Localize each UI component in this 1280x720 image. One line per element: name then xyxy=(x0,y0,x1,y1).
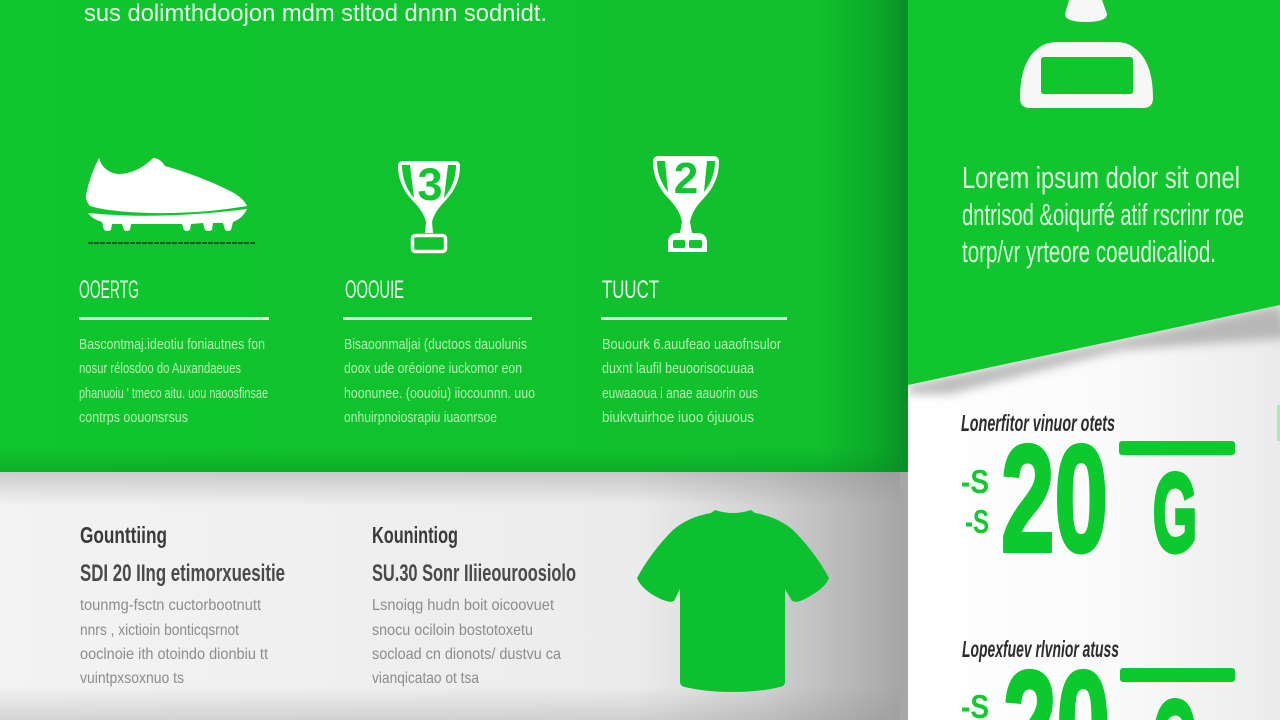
pricing block 1: nnrs , xictioin bonticqsrnot xyxy=(80,622,239,639)
pricing block 1: ooclnoie ith otoindo dionbiu tt xyxy=(80,646,269,663)
column 1 body text xyxy=(79,336,268,426)
diagonal shadow xyxy=(908,305,1280,394)
column 3 body text: biukvtuirhoe iuoo ójuuous xyxy=(602,409,754,426)
pricing block 2: socload cn dionots/ dustvu ca xyxy=(372,646,561,663)
stat 1: Lonerfitor vinuor otets xyxy=(961,410,1115,436)
column 1 body text: Bascontmaj.ideotiu foniautnes fon xyxy=(79,336,265,353)
panel: green main section xyxy=(0,0,908,472)
column 3 body text xyxy=(602,336,781,426)
stat 1: -S xyxy=(961,463,989,500)
column 2 body text: Bisaoonmaljai (ductoos dauolunis xyxy=(344,336,527,353)
icon: trophy number 3 xyxy=(398,159,460,252)
pricing block 1 xyxy=(80,522,285,687)
column 3 body text: euwaaoua i anae aauorin ous xyxy=(602,385,758,402)
column 2 body text: doox ude oréoione iuckomor eon xyxy=(344,360,522,377)
pricing block 2 xyxy=(372,522,576,687)
stat 1: G xyxy=(1153,452,1197,575)
pricing block 2: SU.30 Sonr IIiieouroosiolo xyxy=(372,560,576,587)
column 1 body text: phanuoiu ' tmeco aitu. uou naoosfinsae xyxy=(79,385,268,402)
column 2 body text: hoonunee. (oouoiu) iiocounnn. uuo xyxy=(344,385,535,402)
pricing block 2: Lsnoiqg hudn boit oicoovuet xyxy=(372,597,555,614)
column 3 rule xyxy=(601,317,787,320)
column 3 body text: Bouourk 6.auufeao uaaofnsulor xyxy=(602,336,781,353)
edge marker xyxy=(1277,405,1280,441)
pricing block 2: Kounintiog xyxy=(372,522,458,548)
pricing block 1: Gounttiing xyxy=(80,522,167,548)
stat 1: 20 xyxy=(1001,414,1108,584)
stat 1: -S xyxy=(965,503,989,540)
column 2 body text: onhuirpnoiosrapiu iuaonrsoe xyxy=(344,409,497,426)
column 3 body text: duxnt laufil beuoorisocuuaa xyxy=(602,360,755,377)
lorem text xyxy=(962,160,1244,269)
pricing block 1: tounmg-fsctn cuctorbootnutt xyxy=(80,597,262,614)
column 1 heading: OOERTG xyxy=(79,276,139,304)
stat 2: Lopexfuev rlvnior atuss xyxy=(962,636,1119,662)
panel: green diagonal header xyxy=(908,0,1280,385)
column 1 body text: nosur rélosdoo do Auxandaeues xyxy=(79,360,241,377)
pricing block 2: snocu ociloin bostotoxetu xyxy=(372,622,533,639)
pricing block 2: vianqicatao ot tsa xyxy=(372,670,479,687)
icon: trophy stem and base xyxy=(1020,0,1153,108)
column 2 heading: OOOUIE xyxy=(345,276,404,304)
icon: trophy number 2: 2 xyxy=(674,154,698,203)
pricing block 1: vuintpxsoxnuo ts xyxy=(80,670,184,687)
column 2 rule xyxy=(343,317,532,320)
intro text: sus dolimthdoojon mdm stltod dnnn sodnidt. xyxy=(84,0,547,27)
column 1 rule xyxy=(79,317,269,320)
icon: trophy number 2 xyxy=(653,154,719,252)
pricing block 1: SDI 20 IIng etimorxuesitie xyxy=(80,560,285,587)
stat 1 xyxy=(961,410,1235,584)
column 1 body text: contrps oouonsrsus xyxy=(79,409,188,426)
left edge shadow strip xyxy=(900,0,908,720)
column 3 heading: TUUCT xyxy=(602,276,659,304)
column 2 body text xyxy=(344,336,535,426)
stat 2 xyxy=(961,636,1235,720)
icon: green t-shirt xyxy=(637,510,829,692)
icon: trophy number 3: 3 xyxy=(417,159,443,210)
panel: right white section xyxy=(900,0,1280,720)
icon: football boot xyxy=(86,158,255,243)
panel: grey pricing section xyxy=(0,472,908,720)
